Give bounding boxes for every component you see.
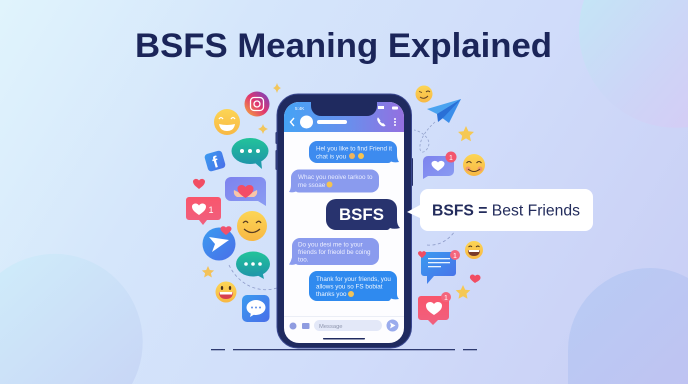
phone side buttons — [276, 132, 413, 186]
dashed arc left — [229, 265, 277, 290]
icon: red like notification: 1 — [208, 205, 214, 215]
call icon — [378, 118, 385, 126]
title: BSFS Meaning Explained — [135, 27, 552, 65]
icon: green chat bubble — [236, 252, 270, 279]
message bubble 3: friends for frieold be coing — [298, 249, 371, 256]
icon: paper plane — [427, 99, 461, 123]
icon: paper plane circle — [202, 228, 236, 260]
icon: winking emoji — [416, 86, 432, 102]
plus button — [290, 322, 296, 330]
back arrow — [290, 118, 294, 126]
phone screen — [284, 102, 404, 343]
icon: purple heart notification: 1 — [449, 155, 453, 162]
send button — [386, 320, 398, 332]
icon: big smiling emoji — [237, 211, 267, 241]
icon: blue app chat — [242, 295, 270, 322]
message bubble 1: Hel you like to find Friend it — [316, 146, 392, 152]
message bubble 2: Whac you neoive tarkoo to — [298, 174, 373, 181]
icon: red heart notification — [418, 292, 451, 325]
input divider — [284, 315, 404, 318]
icon: facebook — [204, 150, 227, 174]
icon: smiling emoji — [214, 109, 240, 135]
message bubble 3: Do you desi me to your — [298, 242, 363, 248]
icon: star — [456, 285, 470, 299]
phone body — [277, 94, 412, 348]
BSFS highlighted bubble: BSFS — [339, 205, 384, 224]
message bubble 2 — [289, 170, 379, 192]
icon: green chat bubble — [232, 138, 268, 169]
menu dots — [394, 118, 396, 126]
camera icon — [302, 323, 310, 329]
icon: purple heart notification — [423, 152, 456, 179]
notch — [311, 102, 377, 116]
icon: red like notification — [186, 197, 221, 225]
icon: sparkle — [273, 83, 281, 93]
icon: star — [458, 126, 474, 141]
background blob: top right — [579, 0, 688, 128]
message bubble 1: chat is you — [316, 154, 347, 160]
status icons — [378, 106, 398, 110]
icon: small heart — [418, 251, 426, 258]
message input — [314, 320, 382, 331]
message bubble 3: too. — [298, 256, 309, 264]
background blob: bottom left — [0, 254, 143, 384]
dashed arc right — [427, 231, 455, 245]
ground line — [211, 349, 477, 350]
icon: sparkle — [258, 124, 268, 134]
icon: laughing emoji — [465, 241, 483, 259]
icon: blue note notification — [421, 250, 460, 284]
callout: BSFS = Best Friends — [407, 189, 593, 231]
chat header — [284, 102, 404, 132]
message bubble 3 — [289, 238, 379, 265]
message input: Message — [319, 324, 343, 330]
BSFS highlighted bubble — [326, 199, 400, 230]
message bubble 4: allows you so FS bobiat — [316, 284, 383, 290]
message bubble 4: thanks yoo — [316, 291, 347, 298]
icon: grinning emoji — [216, 282, 236, 302]
contact avatar — [300, 116, 313, 128]
dashed loop trail — [414, 122, 435, 152]
message bubble 4 — [309, 271, 399, 301]
icon: blue note notification: 1 — [453, 253, 457, 260]
icon: instagram — [244, 92, 270, 116]
icon: red heart notification: 1 — [444, 295, 448, 302]
icon: small heart — [193, 179, 205, 189]
background blob: bottom right — [568, 268, 688, 384]
icon: star — [202, 266, 214, 278]
phone — [276, 94, 413, 348]
icon: blushing emoji — [463, 154, 485, 176]
message bubble 2: me ssoae — [298, 182, 326, 189]
message bubble 1 — [309, 141, 399, 163]
callout: BSFS = Best Friends: BSFS = Best Friends — [432, 202, 580, 220]
icon: small heart on plane — [220, 226, 232, 235]
status time: 5:4K — [295, 106, 304, 111]
icon: purple heart bubble — [225, 177, 266, 206]
icon: facebook: f — [211, 154, 221, 172]
icon: small heart — [470, 275, 480, 283]
message bubble 4: Thank for your friends, you — [316, 276, 391, 283]
contact name bar — [317, 120, 347, 124]
home indicator — [323, 338, 365, 340]
